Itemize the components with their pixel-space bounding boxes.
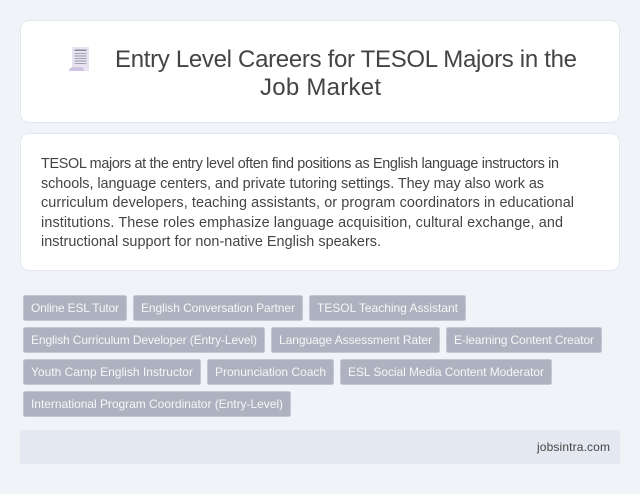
tag: E-learning Content Creator: [446, 328, 602, 352]
tag: English Curriculum Developer: English Curriculum Developer (Entry-Level): [31, 333, 257, 347]
tag: Pronunciation Coach: Pronunciation Coach: [215, 365, 326, 379]
tag: Language Assessment Rater: Language Assessment Rater: [279, 333, 432, 347]
footer: [20, 430, 620, 464]
tag: Pronunciation Coach: [208, 360, 334, 384]
tag: E-learning Content Creator: E-learning Content Creator: [454, 333, 594, 347]
panel: description: [20, 134, 620, 270]
title: Job Market: [260, 74, 381, 101]
tag list: [24, 296, 602, 416]
panel: description: schools, language centers, and private tutoring settings. They may also work as: [41, 176, 544, 192]
footer: jobsintra.com: [536, 440, 610, 454]
tag: English Conversation Partner: [134, 296, 302, 320]
tag: ESL Social Media Content Moderator: ESL Social Media Content Moderator: [348, 365, 544, 379]
tag: English Conversation Partner: English Conversation Partner: [141, 301, 295, 315]
tag: Online ESL Tutor: Online ESL Tutor: [31, 301, 119, 315]
tag: Online ESL Tutor: [24, 296, 126, 320]
tag: TESOL Teaching Assistant: [310, 296, 466, 320]
panel: description: curriculum developers, teaching assistants, or program coordinators in educational: [41, 195, 574, 211]
tag: Youth Camp English Instructor: [24, 360, 200, 384]
panel: description: institutions. These roles emphasize language acquisition, cultural exchange, and: [41, 215, 563, 231]
panel: description: TESOL majors at the entry level often find positions as English language instructors in: [41, 156, 559, 172]
tag: Youth Camp English Instructor: Youth Camp English Instructor: [31, 365, 193, 379]
panel: title card: [20, 20, 620, 122]
tag: TESOL Teaching Assistant: TESOL Teaching Assistant: [317, 301, 459, 315]
tag: International Program Coordinator: [24, 392, 290, 416]
title: Entry Level Careers for TESOL Majors in the: [115, 46, 577, 73]
tag: ESL Social Media Content Moderator: [340, 360, 552, 384]
tag: English Curriculum Developer: [24, 328, 264, 352]
title: [115, 46, 577, 101]
tag: Language Assessment Rater: [272, 328, 440, 352]
icon: paper scroll document: [69, 47, 89, 71]
tag: International Program Coordinator: International Program Coordinator (Entry-Level): [31, 397, 283, 411]
panel: description: instructional support for non-native English speakers.: [41, 234, 381, 250]
